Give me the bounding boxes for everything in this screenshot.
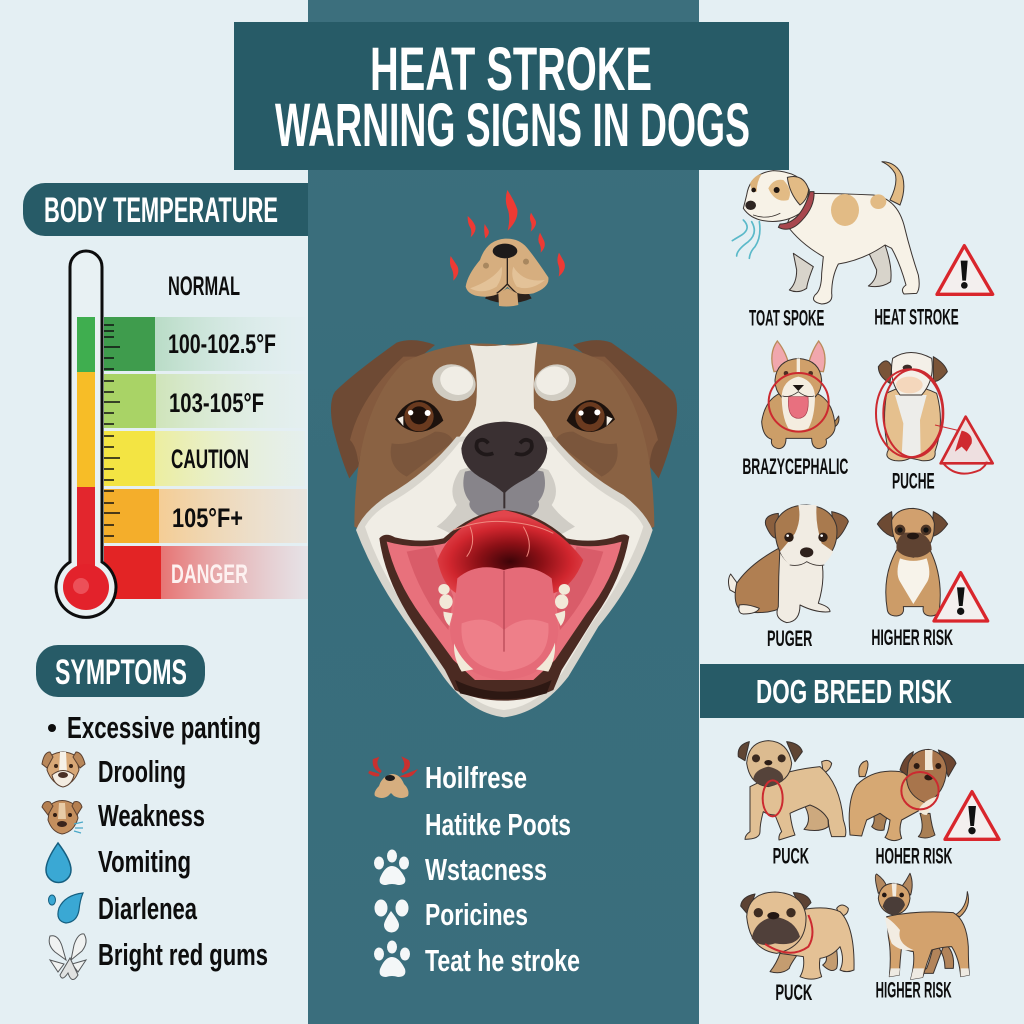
- warning triangle with circle: [941, 417, 993, 474]
- dog: sitting pug: [877, 508, 948, 616]
- symptom: drooling: [42, 752, 186, 789]
- symptom: vomiting: [46, 843, 191, 882]
- label: puck: PUCK: [775, 980, 812, 1005]
- warning triangle: [937, 246, 993, 294]
- temperature labels: CAUTION: [171, 444, 249, 474]
- snout: [466, 239, 548, 306]
- ears: [331, 340, 677, 478]
- list item: hatitke poots: Hatitke Poots: [425, 807, 571, 842]
- heading: body temperature: [23, 183, 308, 236]
- symptom: drooling: Drooling: [98, 754, 186, 789]
- list item: teat he stroke: [374, 940, 580, 978]
- label: toat spoke: TOAT SPOKE: [749, 306, 824, 331]
- thermometer: [56, 251, 120, 617]
- temperature labels: 103-105°F: [169, 388, 264, 418]
- dog: pug close up: [741, 892, 854, 979]
- list item: wstacness: Wstacness: [425, 852, 547, 887]
- temperature labels: 100-102.5°F: [168, 329, 276, 359]
- dog: terrier mix: [875, 873, 969, 979]
- symptom: diarrhea: Diarlenea: [98, 891, 198, 926]
- label: higher risk: HIGHER RISK: [876, 977, 952, 1002]
- temperature labels: 105°F+: [172, 503, 243, 533]
- icon: paw: [374, 850, 409, 885]
- list item: hoilfrese: Hoilfrese: [425, 760, 527, 795]
- symptom: weakness: [42, 798, 205, 834]
- panel: center list: [369, 759, 580, 978]
- muzzle: [356, 437, 653, 717]
- label: higher risk: HIGHER RISK: [871, 625, 953, 650]
- title banner: [234, 22, 789, 170]
- heading: symptoms: SYMPTOMS: [55, 653, 187, 692]
- heading: dog breed risk: [700, 664, 1024, 718]
- panel: dog illustrations upper: [728, 162, 993, 651]
- heading: symptoms: [36, 645, 205, 697]
- list item: poricines: [374, 897, 528, 933]
- heading: body temperature: BODY TEMPERATURE: [44, 191, 278, 230]
- temperature bands: [104, 317, 308, 599]
- head: [354, 344, 654, 603]
- cheek shading: [391, 432, 618, 477]
- white blaze: [457, 342, 555, 440]
- eyes: [395, 400, 615, 432]
- temperature labels: DANGER: [171, 559, 248, 589]
- label: hoher risk: HOHER RISK: [876, 843, 952, 868]
- teeth: [438, 584, 570, 672]
- panel: body temperature: [23, 183, 308, 617]
- warning triangle: [934, 573, 988, 621]
- heat flames: [450, 190, 565, 281]
- panel: symptoms: [36, 645, 268, 980]
- symptom: excessive panting: [48, 710, 261, 745]
- list item: hoilfrese: [369, 759, 527, 798]
- label: puck: PUCK: [773, 843, 809, 868]
- panel: dog breed risk: [738, 741, 999, 1005]
- dog: standing mastiff: [849, 749, 956, 841]
- list item: teat he stroke: Teat he stroke: [425, 943, 580, 978]
- warning triangle: [945, 792, 999, 839]
- tongue: [450, 567, 558, 680]
- icon: paw: [374, 900, 408, 933]
- brow spots: [428, 359, 581, 407]
- open mouth: [379, 510, 629, 701]
- dog: brachycephalic: [762, 341, 839, 449]
- symptom: vomiting: Vomiting: [98, 844, 191, 879]
- dog: puppy: [728, 505, 848, 623]
- symptom: excessive panting: Excessive panting: [67, 710, 261, 745]
- icon: overheated nose: [450, 190, 565, 306]
- symptom: diarrhea: [48, 891, 198, 926]
- symptom: weakness: Weakness: [98, 798, 205, 833]
- symptom: bright red gums: Bright red gums: [98, 937, 268, 972]
- illustration: panting dog face: [331, 340, 677, 717]
- label: puche: PUCHE: [892, 468, 935, 493]
- dog: standing pug: [738, 741, 846, 840]
- label: brachycephalic: BRAZYCEPHALIC: [742, 454, 848, 479]
- nose: [461, 422, 547, 508]
- temperature labels: [168, 271, 276, 589]
- list item: poricines: Poricines: [425, 897, 528, 932]
- symptom: bright red gums: [49, 934, 268, 980]
- dog: standing panting: [732, 162, 919, 304]
- label: puger: PUGER: [767, 626, 812, 651]
- center column: [308, 0, 699, 1024]
- title text: HEAT STROKE: [370, 35, 652, 103]
- list item: wstacness: [374, 850, 547, 887]
- temperature labels: NORMAL: [168, 271, 240, 301]
- dog: sitting bulldog: [876, 352, 963, 461]
- icon: paw: [374, 940, 410, 977]
- title text: [275, 35, 750, 159]
